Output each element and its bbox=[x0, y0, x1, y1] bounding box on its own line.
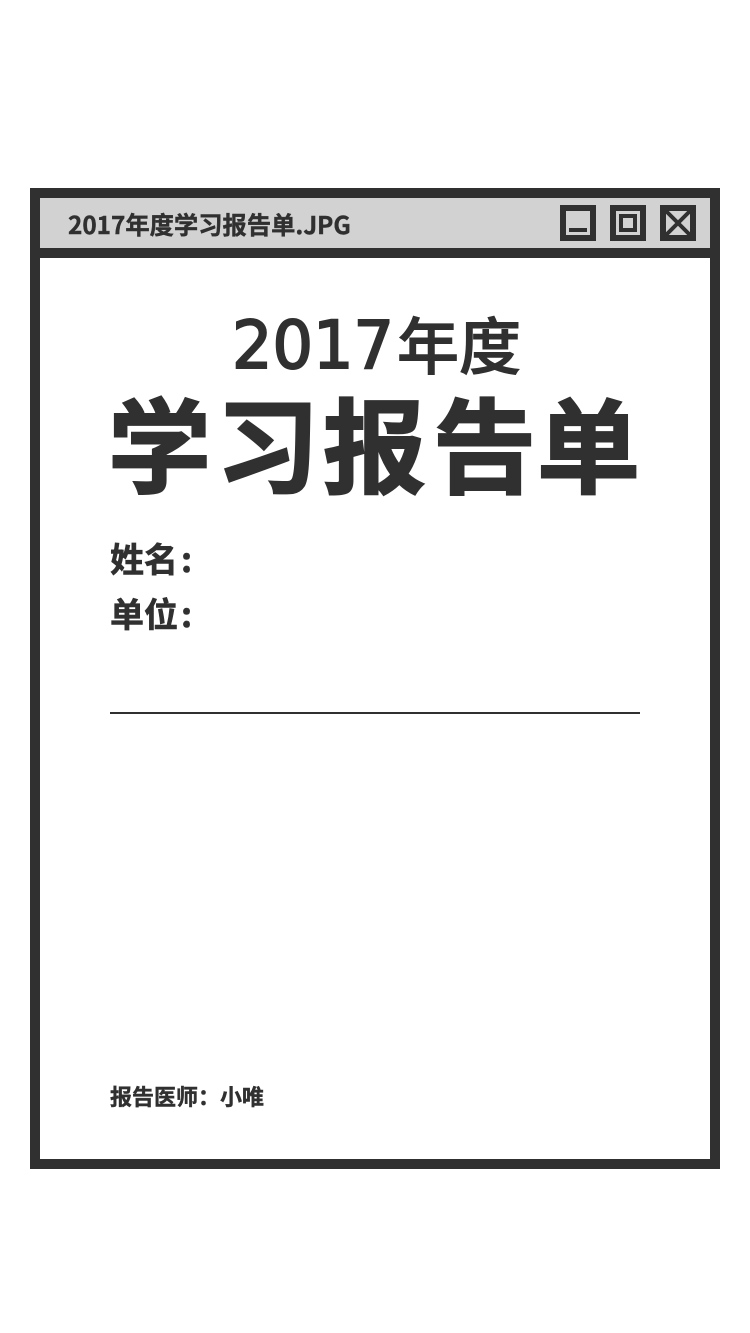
heading: report title: 学习报告单 bbox=[108, 366, 640, 515]
title bar filename: 2017年度学习报告单.JPG bbox=[68, 206, 351, 241]
unit field: 单位: bbox=[110, 588, 192, 637]
icon: close bbox=[663, 208, 693, 238]
report doctor credit: 报告医师：小唯 bbox=[110, 1080, 264, 1112]
heading: year bbox=[232, 297, 521, 387]
icon: maximize bbox=[613, 208, 643, 238]
name field: 姓名: bbox=[110, 533, 192, 582]
icon: minimize bbox=[563, 208, 593, 238]
heading: year: 2017 bbox=[232, 307, 394, 384]
window frame bbox=[35, 193, 715, 1164]
title bar bbox=[40, 198, 710, 258]
heading: year: 年度 bbox=[397, 297, 521, 387]
